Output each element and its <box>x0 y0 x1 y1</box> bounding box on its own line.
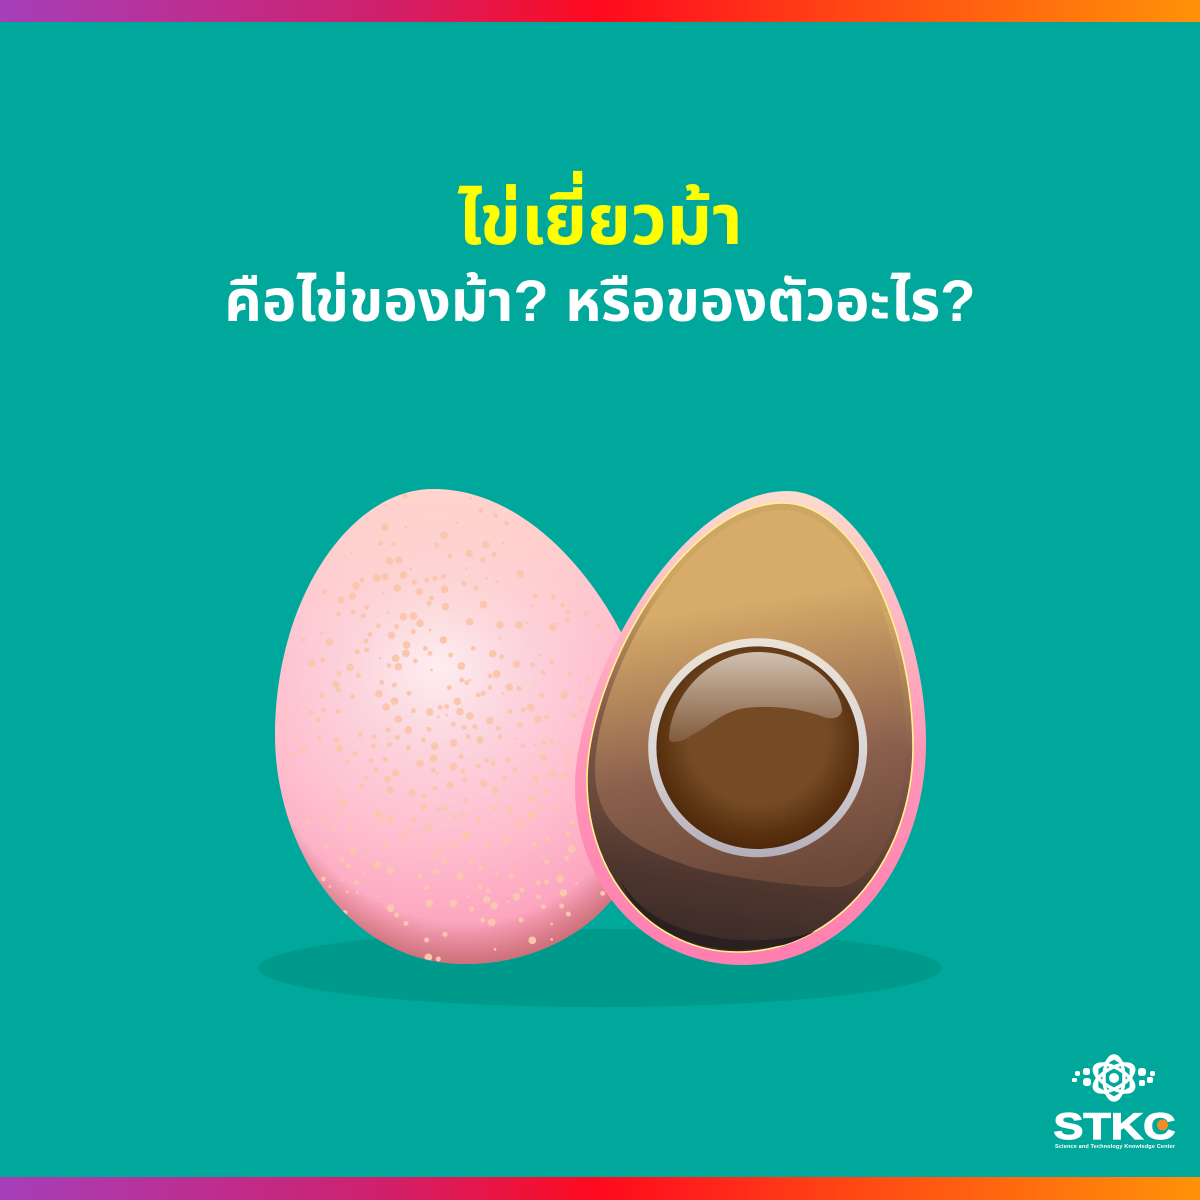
logo wordmark: STKC <box>1054 1106 1176 1147</box>
logo orange dot <box>1157 1120 1168 1130</box>
yolk <box>656 646 859 849</box>
dark crescent at base <box>620 880 834 950</box>
title: ไข่เยี่ยวม้า <box>458 181 742 259</box>
STKC logo <box>1054 1056 1176 1150</box>
yolk gloss highlight <box>669 652 842 742</box>
halved egg <box>575 491 926 965</box>
bottom gradient bar <box>0 1177 1200 1200</box>
yolk ring <box>648 638 867 857</box>
logo tagline: Science and Technology Knowledge Center <box>1055 1144 1176 1150</box>
top gradient bar <box>0 0 1200 22</box>
egg white, cut face <box>587 503 913 952</box>
egg speckles <box>283 496 603 959</box>
whole speckled pink egg <box>275 489 652 964</box>
logo side dots <box>1072 1068 1155 1086</box>
subtitle: คือไข่ของม้า? หรือของตัวอะไร? <box>224 269 976 334</box>
ground shadow <box>258 929 942 1007</box>
egg shell rim <box>575 491 926 965</box>
logo atom icon <box>1090 1056 1138 1100</box>
inner lighter egg white <box>595 586 898 887</box>
